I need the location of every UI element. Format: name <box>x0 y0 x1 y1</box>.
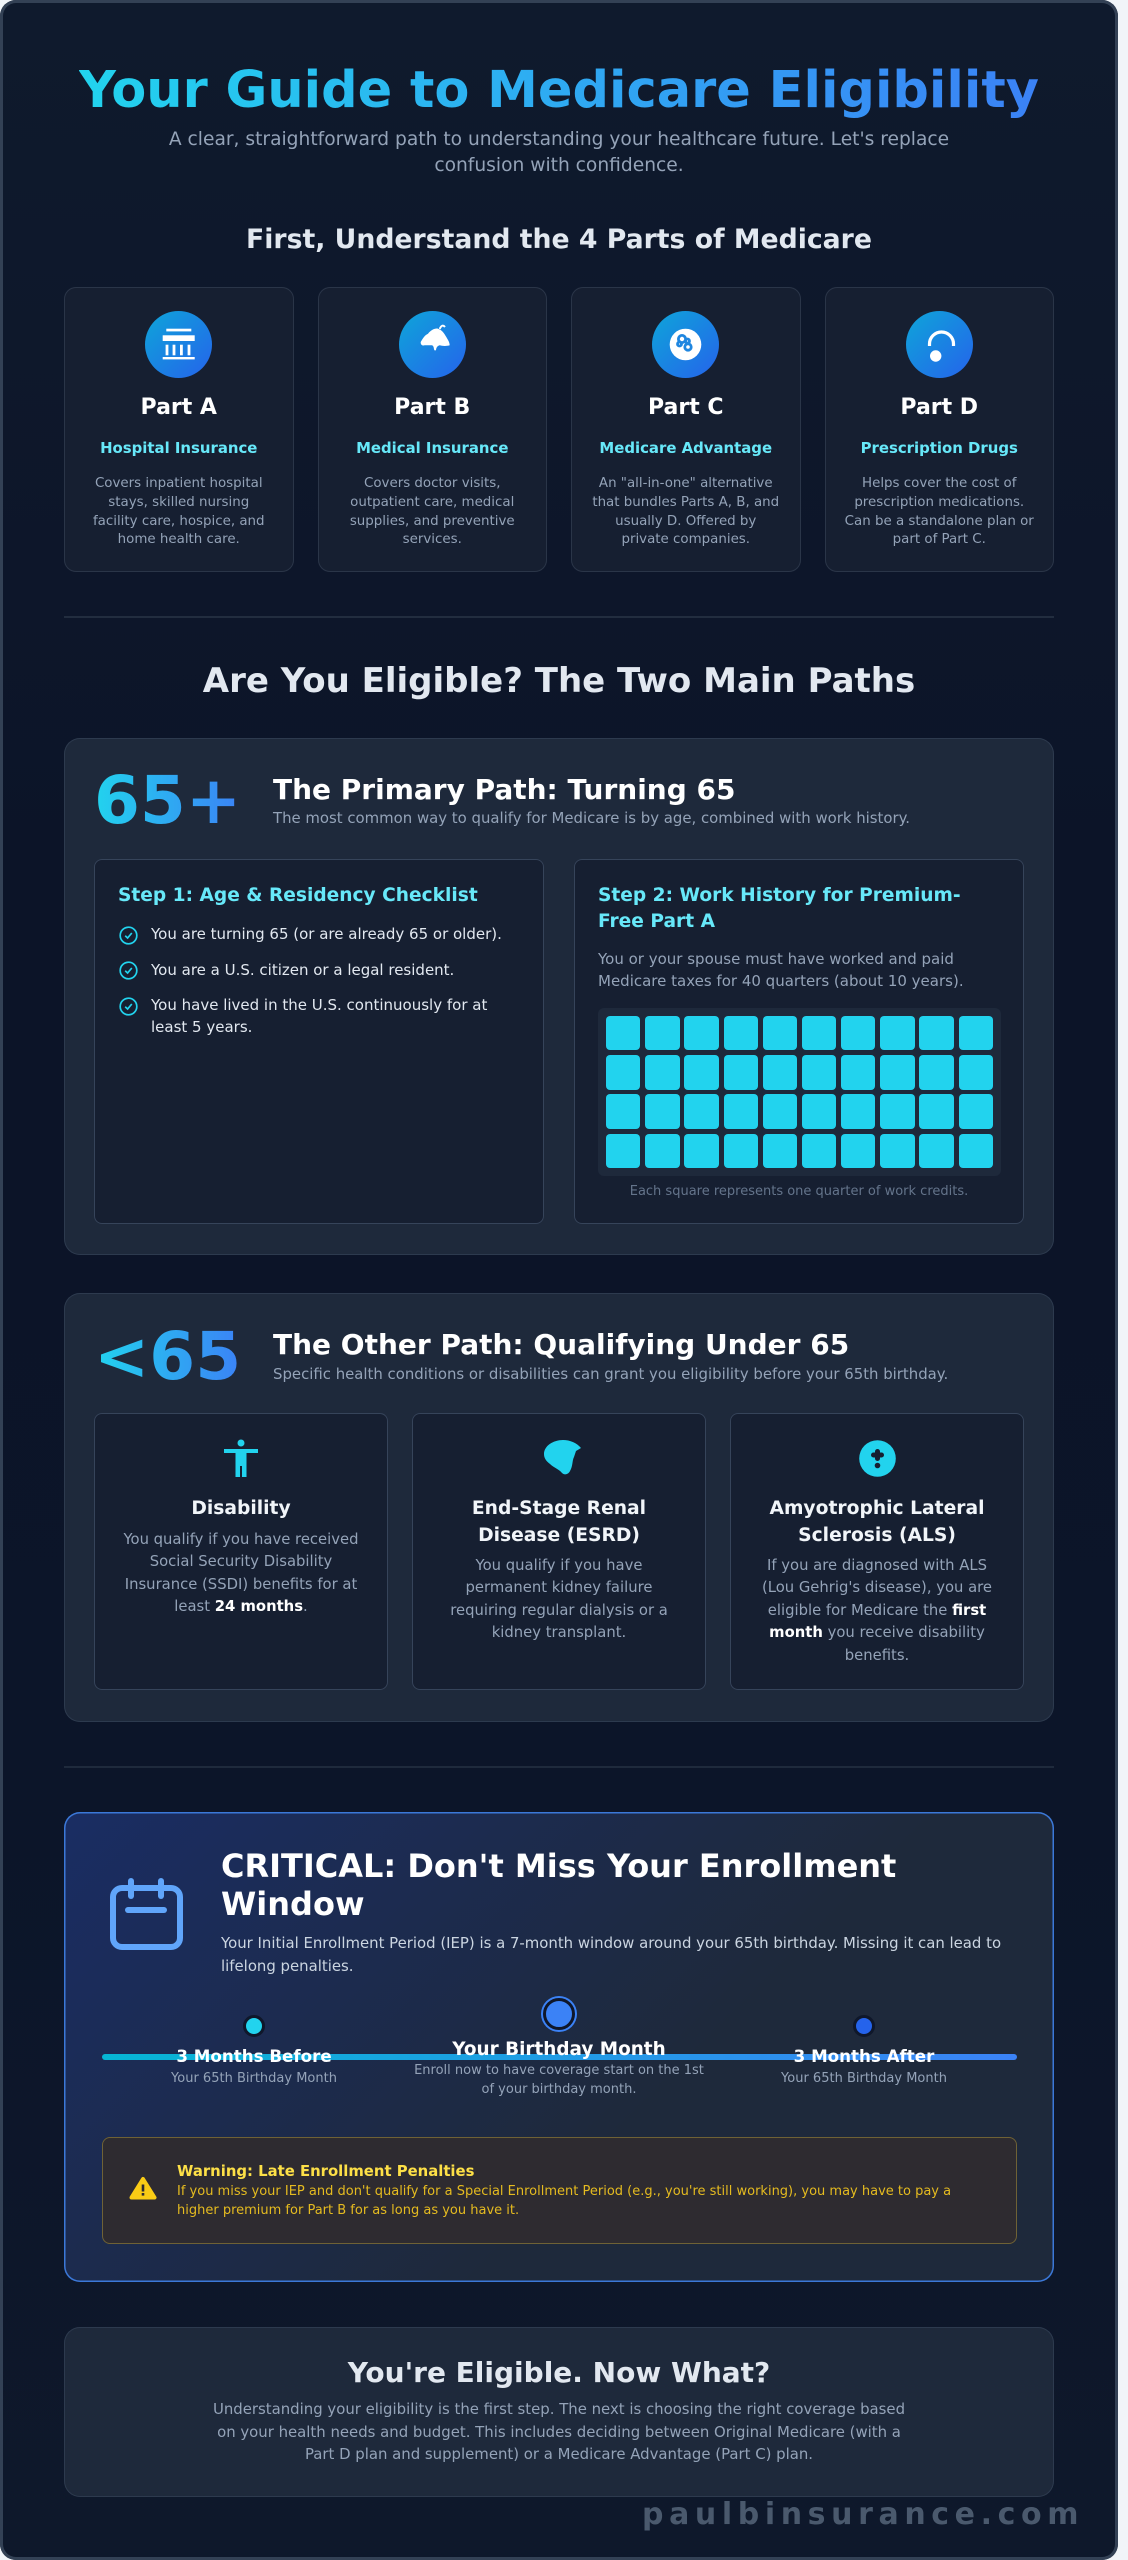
card title: Amyotrophic Lateral <box>770 1498 984 1519</box>
panel: step 2 work history <box>574 858 1024 1224</box>
card title <box>770 1498 984 1546</box>
part subtitle: Prescription Drugs <box>861 439 1018 457</box>
card text: (Lou Gehrig's disease), you are <box>762 1579 992 1596</box>
part description <box>350 476 515 547</box>
card text: requiring regular dialysis or a <box>450 1602 668 1619</box>
next steps text: on your health needs and budget. This includes deciding between Original Medicare (with a <box>217 2422 901 2440</box>
heading: two paths: Are You Eligible? The Two Main Paths <box>203 661 915 701</box>
card text: You qualify if you have received <box>123 1531 359 1548</box>
next steps text <box>213 2400 905 2463</box>
subtitle: A clear, straightforward path to understanding your healthcare future. Let's replace <box>169 129 949 150</box>
big number under 65: <65 <box>94 1318 241 1395</box>
part description: Helps cover the cost of <box>862 476 1016 491</box>
path subtitle: Specific health conditions or disabilities can grant you eligibility before your 65th birthday. <box>273 1365 948 1383</box>
card title: Disability <box>191 1498 291 1519</box>
part description: private companies. <box>621 532 750 547</box>
icon: prescription arc and dot <box>906 310 973 378</box>
subtitle <box>169 129 949 176</box>
icon: warning triangle <box>130 2176 157 2200</box>
milestone note: Your 65th Birthday Month <box>781 2070 947 2086</box>
timeline bar <box>102 2054 1017 2060</box>
icon: kidney <box>544 1440 581 1474</box>
card: ALS <box>730 1413 1024 1690</box>
critical text: lifelong penalties. <box>221 1956 354 1974</box>
step heading: Step 1: Age & Residency Checklist <box>118 884 478 906</box>
milestone dot <box>853 2015 875 2037</box>
milestone note <box>414 2063 704 2097</box>
critical text <box>221 1934 1001 1974</box>
part description: prescription medications. <box>854 495 1024 510</box>
path title: The Primary Path: Turning 65 <box>273 773 736 806</box>
step text: Medicare taxes for 40 quarters (about 10 years). <box>598 972 964 990</box>
timeline milestone: birthday <box>414 1996 704 2097</box>
callout: late enrollment warning <box>102 2137 1017 2244</box>
next steps text: Part D plan and supplement) or a Medicare Advantage (Part C) plan. <box>305 2445 813 2463</box>
critical heading: Window <box>221 1885 364 1923</box>
card title: End-Stage Renal <box>472 1498 646 1519</box>
milestone label: Your Birthday Month <box>452 2039 666 2060</box>
panel: part B <box>318 287 547 572</box>
card text: You qualify if you have <box>476 1557 642 1574</box>
part description <box>845 476 1034 547</box>
path title: The Other Path: Qualifying Under 65 <box>273 1328 849 1361</box>
icon: ALS disc <box>859 1440 896 1477</box>
icon: check 1 <box>119 926 138 945</box>
warning text: higher premium for Part B for as long as you have it. <box>177 2203 519 2218</box>
part description: Covers inpatient hospital <box>95 476 263 491</box>
timeline milestone: before <box>171 2015 337 2086</box>
milestone dot <box>543 1998 575 2030</box>
part description: part of Part C. <box>893 532 986 547</box>
part description: stays, skilled nursing <box>108 495 249 510</box>
part name: Part A <box>141 395 217 420</box>
part description: Covers doctor visits, <box>364 476 501 491</box>
part description <box>592 476 779 547</box>
part description: An "all-in-one" alternative <box>599 476 773 491</box>
milestone note: of your birthday month. <box>482 2082 636 2097</box>
next steps text: Understanding your eligibility is the first step. The next is choosing the right coverage based <box>213 2400 905 2418</box>
card text: month you receive disability <box>769 1624 985 1641</box>
panel: part C <box>571 287 800 572</box>
critical heading <box>221 1847 896 1923</box>
warning heading: Warning: Late Enrollment Penalties <box>177 2162 474 2180</box>
card title <box>472 1498 646 1546</box>
icon: check 3 <box>119 997 138 1016</box>
checklist item 3: least 5 years. <box>151 1018 252 1036</box>
icon: all-in-one disc <box>652 310 719 378</box>
panel: part A <box>64 287 294 572</box>
card text: Insurance (SSDI) benefits for at <box>125 1576 357 1593</box>
part description: Can be a standalone plan or <box>845 514 1034 529</box>
path subtitle: The most common way to qualify for Medicare is by age, combined with work history. <box>273 809 910 827</box>
icon: hospital building <box>145 310 212 378</box>
critical text: Your Initial Enrollment Period (IEP) is a 7-month window around your 65th birthday. Missing it can lead to <box>221 1934 1001 1952</box>
subtitle: confusion with confidence. <box>434 155 684 176</box>
checklist item 2: You are a U.S. citizen or a legal resident. <box>151 960 454 978</box>
panel: enrollment window <box>64 1812 1054 2282</box>
step heading <box>598 884 961 932</box>
card text <box>123 1531 359 1615</box>
part subtitle: Medical Insurance <box>356 439 508 457</box>
big number 65+: 65+ <box>94 762 241 839</box>
card text <box>450 1557 668 1641</box>
card text: kidney transplant. <box>492 1624 626 1641</box>
card: ESRD <box>412 1413 706 1690</box>
icon: calendar <box>110 1878 183 1950</box>
work credit grid <box>598 1008 1001 1176</box>
card title: Disease (ESRD) <box>478 1525 640 1546</box>
milestone label: 3 Months After <box>794 2046 934 2066</box>
timeline milestone: after <box>781 2015 947 2086</box>
heading: four parts: First, Understand the 4 Parts of Medicare <box>246 224 872 255</box>
part name: Part B <box>394 395 470 420</box>
card title: Sclerosis (ALS) <box>798 1525 956 1546</box>
milestone note: Enroll now to have coverage start on the 1st <box>414 2063 704 2078</box>
part description: home health care. <box>118 532 240 547</box>
part description: services. <box>403 532 462 547</box>
warning text <box>177 2184 951 2218</box>
grid caption: Each square represents one quarter of work credits. <box>630 1184 968 1198</box>
step heading: Free Part A <box>598 911 715 932</box>
step text: You or your spouse must have worked and paid <box>598 950 954 968</box>
part description: facility care, hospice, and <box>93 514 265 529</box>
next steps heading: You're Eligible. Now What? <box>348 2356 770 2389</box>
part description: usually D. Offered by <box>615 514 756 529</box>
card text: benefits. <box>845 1647 909 1664</box>
part name: Part C <box>648 395 724 420</box>
watermark: paulbinsurance.com <box>642 2497 1084 2532</box>
card text <box>762 1557 992 1664</box>
panel: part D <box>824 287 1054 572</box>
step heading: Step 2: Work History for Premium- <box>598 884 961 906</box>
warning text: If you miss your IEP and don't qualify for a Special Enrollment Period (e.g., you're still working), you may have to pay a <box>177 2184 951 2199</box>
card text: eligible for Medicare the first <box>768 1602 986 1619</box>
card text: If you are diagnosed with ALS <box>767 1557 987 1574</box>
icon: person <box>224 1440 258 1477</box>
critical heading: CRITICAL: Don't Miss Your Enrollment <box>221 1847 896 1885</box>
part subtitle: Medicare Advantage <box>599 439 772 457</box>
milestone dot <box>243 2015 265 2037</box>
milestone label: 3 Months Before <box>176 2046 332 2066</box>
card: disability <box>94 1413 388 1690</box>
icon: check 2 <box>119 961 138 980</box>
part description: that bundles Parts A, B, and <box>592 495 779 510</box>
panel: next steps <box>64 2327 1054 2497</box>
part description: supplies, and preventive <box>350 514 515 529</box>
part subtitle: Hospital Insurance <box>100 439 257 457</box>
part description: outpatient care, medical <box>350 495 514 510</box>
checklist item 1: You are turning 65 (or are already 65 or older). <box>151 924 502 942</box>
card text: least 24 months. <box>174 1598 308 1615</box>
card text: Social Security Disability <box>150 1553 332 1570</box>
part name: Part D <box>900 395 978 420</box>
checklist item 3 <box>151 996 488 1036</box>
panel: step 1 checklist <box>94 858 544 1224</box>
checklist item 3: You have lived in the U.S. continuously for at <box>151 996 487 1014</box>
milestone note: Your 65th Birthday Month <box>171 2070 337 2086</box>
panel: other path <box>64 1293 1054 1722</box>
title: Your Guide to Medicare Eligibility <box>79 61 1039 120</box>
step text <box>598 950 964 990</box>
part description <box>93 476 265 547</box>
panel: primary path <box>64 738 1054 1255</box>
card text: permanent kidney failure <box>466 1579 652 1596</box>
icon: stethoscope blob <box>399 310 466 378</box>
